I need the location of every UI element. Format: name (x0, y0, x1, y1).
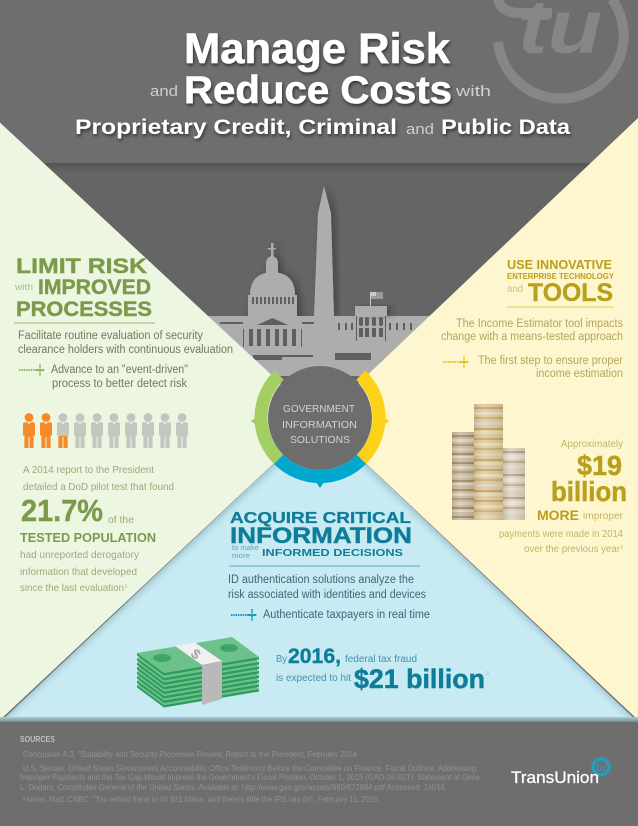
statistic: 19 billion (499, 438, 627, 555)
statistic: 21.7 percent: TESTED POPULATION (20, 530, 156, 545)
ring tips (250, 418, 390, 488)
body text (441, 318, 623, 343)
heading: limit risk (14, 255, 152, 321)
sources: Hunter, Matt. CNBC. "Tax-refund fraud to hit $21 billion, and there's little the IRS can do", February 11, 2015. (23, 795, 380, 804)
sources: SOURCES (20, 735, 56, 744)
TransUnion logo: TransUnion (511, 768, 599, 787)
heading: tools: USE INNOVATIVE (507, 258, 612, 272)
ground block (205, 316, 433, 376)
statistic: 21.7 percent: detailed a DoD pilot test that found (23, 481, 174, 493)
sources: L. Dodaro, Comptroller General of the United States. Available at: http://www.gao.gov/assets/680/672884.pdf Accessed: 1/4/16. (20, 783, 447, 792)
body text: The Income Estimator tool impacts (456, 318, 623, 330)
statistic: 19 billion: improper (583, 510, 623, 522)
statistic: 19 billion: payments were made in 2014 (499, 528, 623, 540)
title (75, 25, 570, 139)
statistic: 21 billion: is expected to hit (276, 673, 351, 684)
heading: acquire: more (232, 553, 250, 560)
icon: money stack (137, 637, 259, 708)
statistic: 19 billion: billion (551, 476, 627, 507)
panel edge shadows (6, 455, 632, 717)
statistic: 19 billion: MORE (537, 507, 579, 523)
heading: tools: ENTERPRISE TECHNOLOGY (507, 272, 615, 281)
heading: limit risk: with (14, 282, 33, 292)
center hub (250, 366, 390, 488)
statistic: 21.7 percent: 1 (124, 584, 128, 590)
panel: use innovative tools (441, 258, 627, 555)
title: and (150, 83, 178, 100)
sources: U.S. Senate, United States Government Accountability Office Testimony Before the Committee on Finance. Fiscal Outlook. Addressing (23, 764, 476, 773)
statistic: 21.7 percent: had unreported derogatory (20, 549, 140, 561)
heading: tools: TOOLS (528, 279, 613, 307)
heading: limit risk: IMPROVED (38, 276, 151, 299)
title: Manage Risk (184, 25, 450, 73)
heading: acquire: ACQUIRE CRITICAL (230, 510, 411, 527)
heading: tools (507, 258, 615, 307)
statistic: 21 billion: federal tax fraud (345, 654, 417, 665)
icon: money stack: $ (188, 645, 204, 663)
title: Proprietary Credit, Criminal (75, 116, 397, 139)
statistic: 21 billion: $21 billion (354, 664, 485, 694)
statistic: 21.7 percent: of the (108, 515, 134, 526)
sources (20, 735, 481, 804)
hub circle (268, 366, 372, 470)
panel: tools background (320, 118, 638, 720)
heading rule (14, 322, 155, 324)
statistic: 19 billion: $19 (577, 450, 622, 481)
heading: limit risk: LIMIT RISK (16, 255, 147, 278)
body text: Facilitate routine evaluation of security (18, 330, 203, 342)
statistic: 21.7 percent: since the last evaluation (20, 582, 124, 594)
arrow text (478, 355, 623, 380)
body text (228, 574, 426, 601)
title: with (455, 83, 491, 100)
TransUnion logo: tu (596, 763, 605, 774)
TransUnion logo (511, 759, 609, 787)
statistic: 21 billion: 3 (486, 671, 489, 677)
Capitol details (220, 297, 412, 360)
heading: tools: and (507, 284, 523, 295)
title: and (406, 121, 434, 138)
Capitol building (243, 243, 303, 322)
heading rule (507, 306, 614, 308)
statistic: 21 billion: 2016, (288, 645, 341, 668)
hub label: INFORMATION (282, 419, 357, 431)
sources: Conclusion A.3, "Suitability and Security Processes Review, Report to the President, February 2014 (23, 750, 358, 759)
arrow text: The first step to ensure proper (478, 355, 623, 367)
body text: ID authentication solutions analyze the (228, 574, 414, 586)
icon: dotted arrow (443, 356, 469, 368)
heading: acquire: to make (232, 545, 259, 552)
panel: information background (0, 420, 638, 722)
statistic: 19 billion: over the previous year (524, 543, 620, 555)
arrow text: income estimation (536, 368, 623, 380)
statistic: 21.7 percent: 21.7% (21, 493, 103, 528)
ring: blue (279, 459, 361, 477)
statistic: 21 billion (276, 645, 489, 694)
statistic: 21.7 percent (20, 464, 174, 594)
heading: acquire (230, 510, 412, 560)
body text: risk associated with identities and devices (228, 589, 426, 601)
ring: yellow (361, 375, 379, 459)
arrow text: process to better detect risk (52, 378, 187, 390)
hub label: SOLUTIONS (290, 434, 350, 446)
header shadow band (0, 163, 638, 173)
statistic: 21.7 percent: A 2014 report to the President (23, 464, 154, 476)
title: Reduce Costs (184, 69, 452, 112)
statistic: 19 billion: Approximately (561, 438, 624, 450)
body text: change with a means-tested approach (441, 331, 623, 343)
hub label: GOVERNMENT (283, 403, 356, 415)
ring: green (261, 375, 279, 459)
heading: acquire: INFORMATION (230, 523, 412, 548)
icon: dotted arrow (19, 364, 45, 376)
heading: limit risk: PROCESSES (16, 298, 152, 321)
lower dark background (0, 163, 638, 423)
icon: coin stacks (452, 404, 525, 520)
panel: improve processes background (0, 123, 320, 720)
hub label (282, 403, 357, 446)
statistic: 19 billion: 2 (620, 545, 624, 551)
TransUnion watermark (498, 0, 624, 99)
pictogram: people (23, 413, 188, 448)
Washington skyline illustration (205, 186, 433, 376)
body text: clearance holders with continuous evaluation (18, 344, 233, 356)
Washington Monument (314, 186, 334, 316)
arrow text (51, 364, 188, 390)
title: Public Data (441, 116, 570, 139)
statistic: 21.7 percent: information that developed (20, 566, 137, 578)
icon: dotted arrow (231, 609, 257, 621)
body text (18, 330, 233, 356)
dark header background (0, 0, 638, 163)
White House building with flag (355, 292, 387, 341)
arrow text: Advance to an "event-driven" (51, 364, 188, 376)
panel: limit risk (14, 255, 233, 594)
arrow text: Authenticate taxpayers in real time (263, 609, 430, 621)
heading rule (229, 566, 420, 567)
heading: acquire: INFORMED DECISIONS (262, 547, 403, 559)
footer (0, 717, 638, 826)
panel: acquire critical information (137, 510, 489, 708)
sources: Improper Payments and the Tax Gap Would Improve the Government's Fiscal Position, October 1, 2015 (GAO-16-92T). Statement of Gene (20, 773, 481, 782)
statistic: 21 billion: By (276, 654, 287, 665)
